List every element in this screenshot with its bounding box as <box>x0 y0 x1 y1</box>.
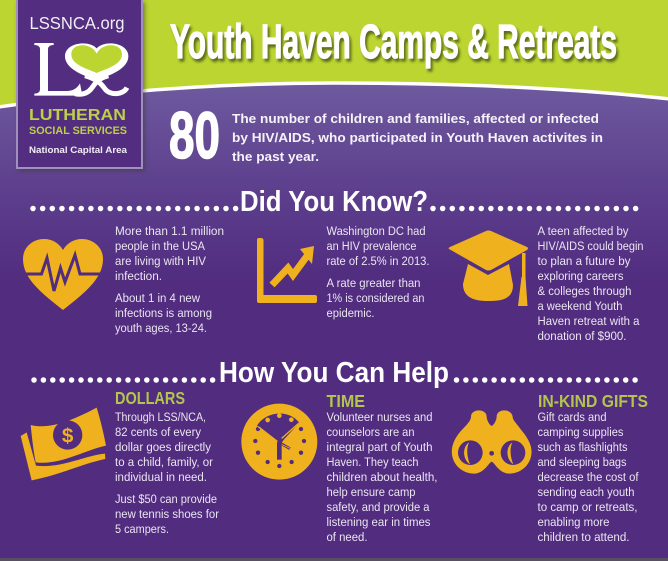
text: time: help ensure camp <box>326 485 416 499</box>
text: time: Volunteer nurses and <box>326 410 432 424</box>
text: dollars: to a child, family, or <box>115 455 213 469</box>
text: HIV in the USA: More than 1.1 million <box>115 224 224 238</box>
logo subtitle: SOCIAL SERVICES <box>29 125 127 137</box>
text: dollars: Just $50 can provide <box>115 492 217 506</box>
icon: graduation cap <box>449 230 528 306</box>
text: dollars: Through LSS/NCA, <box>115 410 206 424</box>
text: time: of need. <box>326 530 368 544</box>
text: HIV in the USA: people in the USA <box>115 239 206 253</box>
icon: dollar bills: $ <box>62 425 74 448</box>
text: time: safety, and provide a <box>326 500 430 514</box>
text: Washington DC prevalence: A rate greater than <box>326 276 420 290</box>
text: Washington DC prevalence <box>326 224 430 320</box>
text: Washington DC prevalence: Washington DC had <box>326 224 426 238</box>
text: HIV in the USA: are living with HIV <box>115 254 207 268</box>
logo region: National Capital Area <box>29 145 128 156</box>
heading: Did You Know?: Did You Know? <box>240 186 428 218</box>
text: in-kind gifts: children to attend. <box>538 530 630 544</box>
heading: Time: TIME <box>326 391 365 411</box>
text: HIV in the USA: infections is among <box>115 306 212 320</box>
text: in-kind gifts: to camp or retreats, <box>538 500 638 514</box>
text: HIV in the USA: About 1 in 4 new <box>115 291 200 305</box>
text: Washington DC prevalence: epidemic. <box>326 306 374 320</box>
text: time: listening ear in times <box>326 515 430 529</box>
green header background <box>0 0 668 115</box>
text: in-kind gifts: and sleeping bags <box>538 455 626 469</box>
text: in-kind gifts: such as flashlights <box>538 440 628 454</box>
statistic description: by HIV/AIDS, who participated in Youth Haven activites in <box>232 130 603 145</box>
icon: heart with pulse <box>23 239 103 310</box>
logo name: LUTHERAN <box>29 107 126 124</box>
text: HIV in the USA: youth ages, 13-24. <box>115 321 207 335</box>
heading: Dollars: DOLLARS <box>115 388 185 408</box>
text: in-kind gifts: enabling more <box>538 515 610 529</box>
text: HIV in the USA: infection. <box>115 269 162 283</box>
icon: clock <box>241 404 317 480</box>
text: teen retreat: & colleges through <box>538 284 632 298</box>
statistic description: The number of children and families, affected or infected <box>232 111 599 126</box>
text: dollars <box>115 410 219 536</box>
text: time: Haven. They teach <box>326 455 418 469</box>
text: in-kind gifts: decrease the cost of <box>538 470 639 484</box>
text: teen retreat: to plan a future by <box>538 254 631 268</box>
text: in-kind gifts: Gift cards and <box>538 410 606 424</box>
text: teen retreat: donation of $900. <box>538 329 626 343</box>
text: Washington DC prevalence: an HIV prevalence <box>326 239 417 253</box>
text: time <box>326 410 438 544</box>
statistic: 80: 80 <box>169 98 220 172</box>
logo panel <box>17 0 145 171</box>
bottom edge strip <box>0 558 668 561</box>
heading: In-Kind Gifts: IN-KIND GIFTS <box>538 391 648 411</box>
text: teen retreat: A teen affected by <box>538 224 629 238</box>
text: teen retreat: exploring careers <box>538 269 624 283</box>
text: time: integral part of Youth <box>326 440 432 454</box>
text: teen retreat <box>538 224 644 343</box>
text: time: counselors are an <box>326 425 414 439</box>
text: HIV in the USA <box>115 224 224 335</box>
icon: binoculars <box>452 410 532 474</box>
text: Washington DC prevalence: 1% is considered an <box>326 291 424 305</box>
logo mark <box>34 43 128 96</box>
text: dollars: individual in need. <box>115 470 207 484</box>
white curved edge <box>0 83 668 107</box>
text: dollars: 82 cents of every <box>115 425 202 439</box>
text: in-kind gifts <box>538 410 639 544</box>
text: in-kind gifts: sending each youth <box>538 485 634 499</box>
text: in-kind gifts: camping supplies <box>538 425 624 439</box>
heading: How You Can Help: How You Can Help <box>219 357 449 389</box>
statistic description: the past year. <box>232 149 319 164</box>
logo website: LSSNCA.org <box>30 13 124 33</box>
text: dollars: new tennis shoes for <box>115 507 219 521</box>
text: dollars: dollar goes directly <box>115 440 212 454</box>
text: teen retreat: Haven retreat with a <box>538 314 640 328</box>
text: time: children about health, <box>326 470 438 484</box>
statistic description <box>232 111 603 164</box>
icon: rising chart arrow <box>257 238 317 303</box>
text: dollars: 5 campers. <box>115 522 169 536</box>
text: teen retreat: HIV/AIDS could begin <box>538 239 644 253</box>
text: teen retreat: a weekend Youth <box>538 299 622 313</box>
icon: dollar bills <box>21 408 106 480</box>
text: Washington DC prevalence: rate of 2.5% in 2013. <box>326 254 430 268</box>
